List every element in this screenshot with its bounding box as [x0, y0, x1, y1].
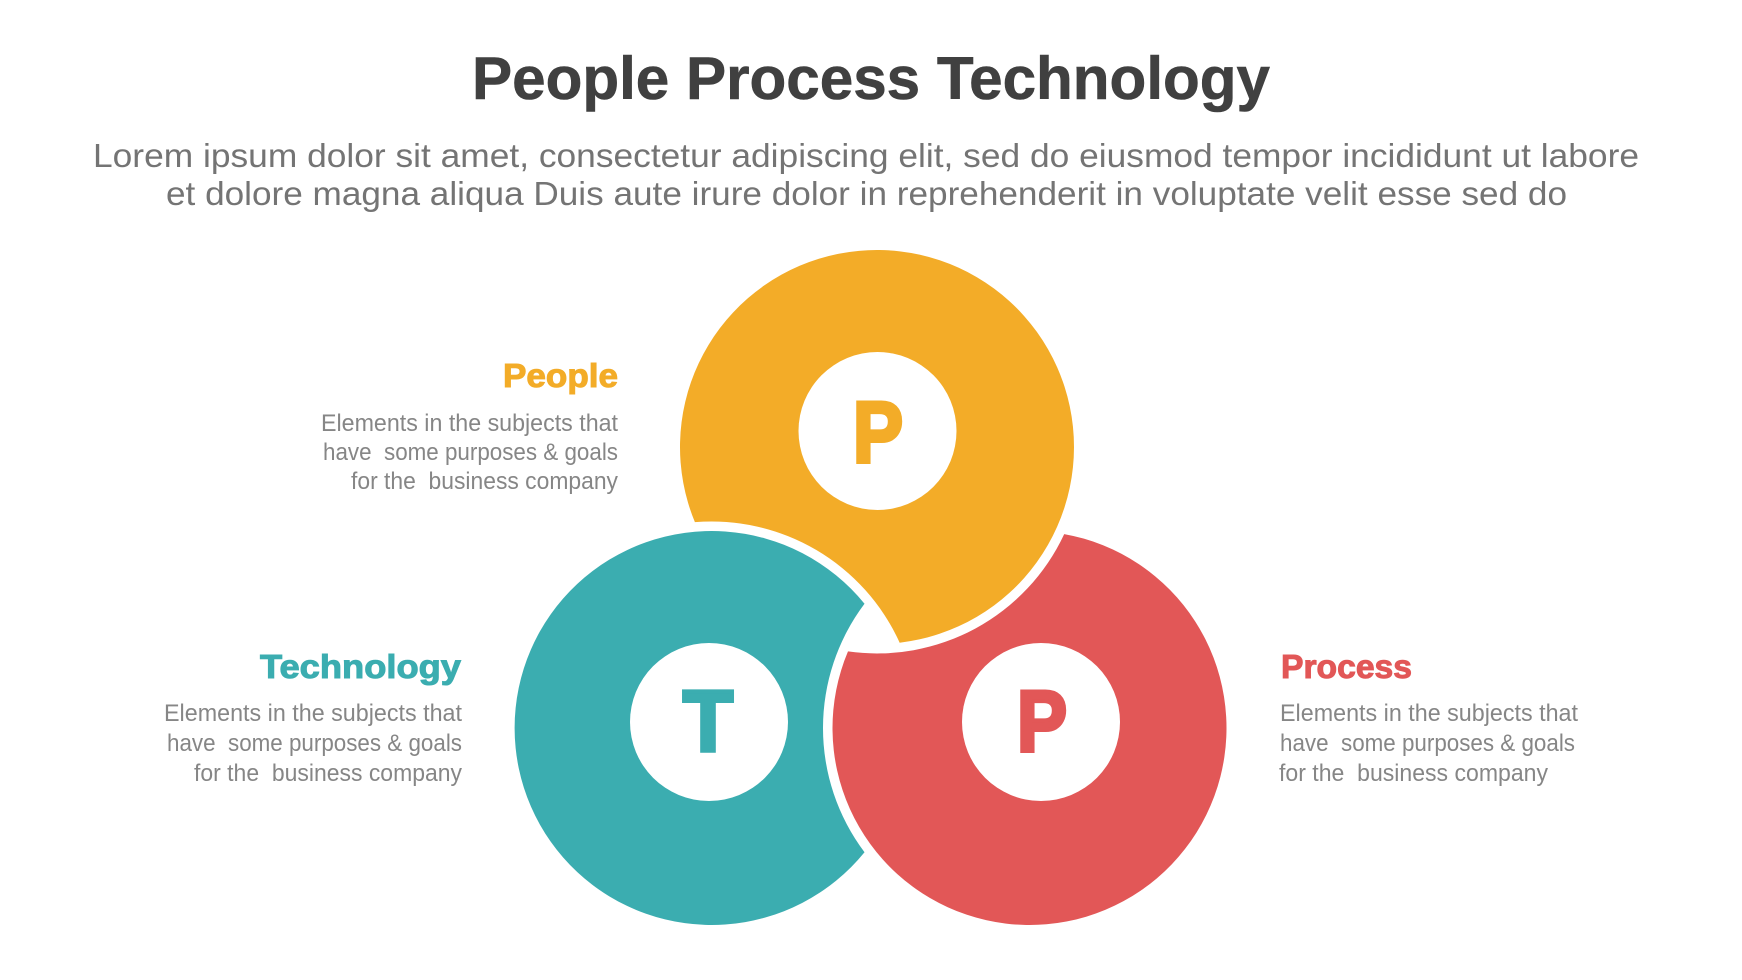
label: process: Elements in the subjects that	[1280, 700, 1578, 727]
label: people: People	[503, 357, 618, 394]
label: technology: for the business company	[194, 760, 463, 787]
circle: process	[833, 534, 1227, 925]
label: technology: Elements in the subjects that	[164, 700, 462, 727]
label: people	[321, 357, 619, 495]
label: technology	[164, 648, 463, 787]
label: process	[1279, 648, 1578, 787]
subtitle text	[93, 137, 1639, 212]
subtitle text: et dolore magna aliqua Duis aute irure dolor in reprehenderit in voluptate velit esse sed do	[166, 175, 1567, 212]
venn diagram	[515, 250, 1227, 925]
label: technology: Technology	[260, 648, 462, 685]
label: process: have some purposes & goals	[1280, 730, 1575, 757]
label: technology: have some purposes & goals	[167, 730, 462, 757]
subtitle text: Lorem ipsum dolor sit amet, consectetur adipiscing elit, sed do eiusmod tempor incididunt ut labore	[93, 137, 1639, 174]
label: process: Process	[1281, 648, 1412, 685]
label: people: have some purposes & goals	[323, 439, 618, 466]
circle: process: P	[1017, 674, 1067, 770]
circle: people	[680, 250, 1074, 643]
circle: technology	[515, 531, 865, 925]
label: process: for the business company	[1279, 760, 1549, 787]
label: people: Elements in the subjects that	[321, 410, 618, 437]
label: people: for the business company	[351, 468, 619, 495]
title: People Process Technology	[472, 45, 1271, 112]
circle: technology: T	[683, 674, 733, 770]
circle: people: P	[853, 385, 903, 481]
